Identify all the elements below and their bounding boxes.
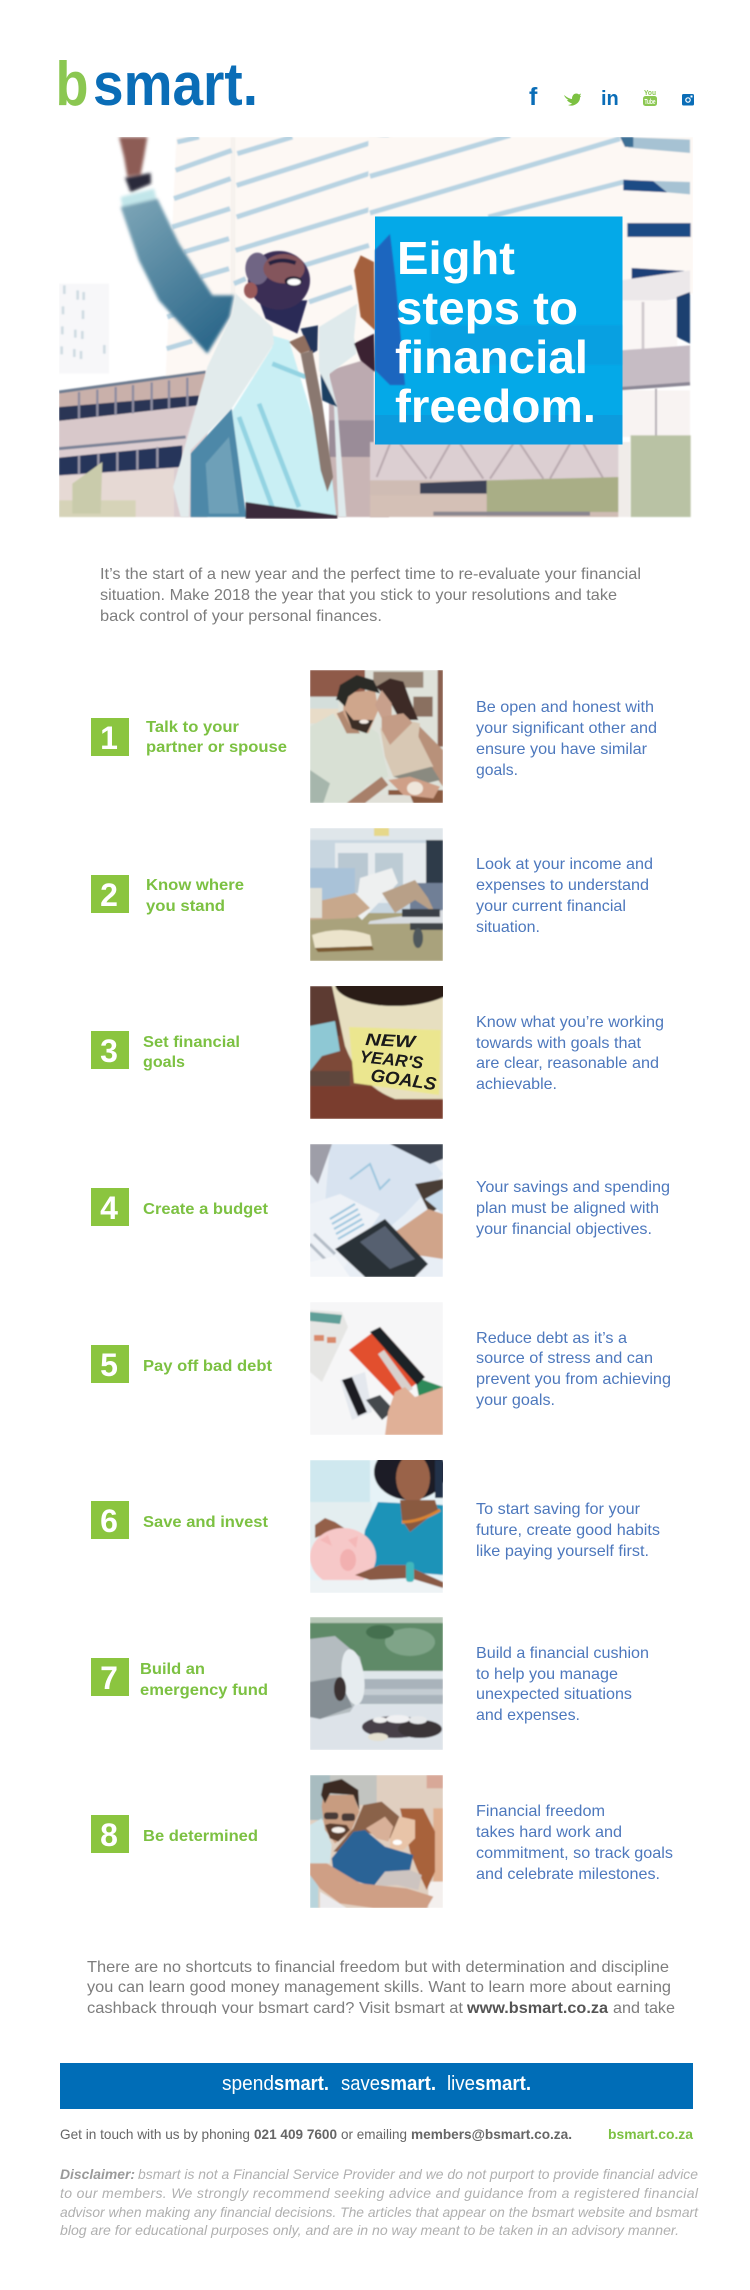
photo: mug with sticky note: GOALS	[369, 1065, 438, 1094]
tagline banner: live	[447, 2073, 475, 2095]
step 7	[91, 1617, 649, 1750]
tagline banner: smart.	[274, 2073, 329, 2095]
photo: mug with sticky note: NEW	[365, 1030, 418, 1052]
icon: youtube	[643, 88, 657, 106]
step 6 heading: Save and invest	[143, 1514, 269, 1531]
closing text (clipped)	[87, 1959, 675, 2017]
step 2 description: expenses to understand	[476, 877, 649, 894]
tagline banner: save	[341, 2073, 380, 2095]
step 2 heading: Know where	[146, 877, 244, 894]
step 2 description: Look at your income and	[476, 856, 653, 873]
photo: happy family hug	[310, 1775, 443, 1908]
number badge 2: 2	[100, 877, 118, 913]
step 2 description	[476, 856, 653, 936]
step 2	[91, 828, 653, 961]
step 8 description: takes hard work and	[476, 1824, 622, 1841]
step 2 description: situation.	[476, 919, 540, 936]
number badge 2	[91, 875, 129, 913]
step 7 heading	[140, 1661, 268, 1699]
step 1 description	[476, 699, 657, 779]
intro text: back control of your personal finances.	[100, 608, 382, 625]
step 5 heading: Pay off bad debt	[143, 1358, 273, 1375]
contact line: Get in touch with us by phoning	[60, 2126, 250, 2142]
step 7 description	[476, 1645, 649, 1724]
step 7 heading: emergency fund	[140, 1682, 268, 1699]
step 5 description: source of stress and can	[476, 1350, 653, 1367]
step 8	[91, 1775, 673, 1908]
logo: b	[56, 50, 88, 119]
closing text (clipped): and take	[613, 2000, 675, 2017]
contact line	[60, 2126, 693, 2142]
step 5 description: prevent you from achieving	[476, 1371, 671, 1388]
title: steps to	[396, 282, 578, 334]
step 1 description: your significant other and	[476, 720, 657, 737]
step 7 description: and expenses.	[476, 1707, 580, 1724]
step 7 heading: Build an	[140, 1661, 205, 1678]
step 4 heading: Create a budget	[143, 1201, 269, 1218]
icon: facebook: f	[529, 83, 538, 111]
step 6 description	[476, 1501, 660, 1560]
number badge 4	[91, 1188, 129, 1226]
number badge 8: 8	[100, 1817, 118, 1853]
step 6 description: like paying yourself first.	[476, 1543, 649, 1560]
step 5 description: Reduce debt as it’s a	[476, 1330, 627, 1347]
disclaimer: to our members. We strongly recommend seeking advice and guidance from a registered financial	[60, 2185, 699, 2201]
step 7 description: Build a financial cushion	[476, 1645, 649, 1662]
contact line: members@bsmart.co.za.	[411, 2126, 572, 2142]
background left half	[59, 137, 392, 517]
step 1	[91, 670, 657, 803]
photo: hand holding credit cards	[310, 1302, 443, 1435]
icon: twitter	[564, 94, 581, 106]
step 4	[91, 1144, 670, 1277]
step 3 description: achievable.	[476, 1076, 557, 1093]
closing text (clipped): There are no shortcuts to financial freedom but with determination and discipline	[87, 1959, 669, 1976]
number badge 3: 3	[100, 1033, 118, 1069]
step 1 heading: partner or spouse	[146, 739, 287, 756]
background right half	[368, 135, 693, 517]
disclaimer: bsmart is not a Financial Service Provider and we do not purport to provide financial advice	[138, 2166, 698, 2182]
step 1 heading: Talk to your	[146, 719, 239, 736]
step 3 heading: Set financial	[143, 1034, 240, 1051]
step 8 description	[476, 1803, 673, 1883]
social icons	[529, 83, 694, 111]
number badge 7	[91, 1658, 129, 1696]
step 1 heading	[146, 719, 287, 756]
step 5	[91, 1302, 671, 1435]
step 4 description: your financial objectives.	[476, 1221, 652, 1238]
intro text: It’s the start of a new year and the perfect time to re-evaluate your financial	[100, 566, 641, 583]
disclaimer: advisor when making any financial decisions. The articles that appear on the bsmart website and bsmart	[60, 2204, 699, 2220]
contact line: or emailing	[341, 2126, 407, 2142]
man	[119, 137, 375, 519]
step 3 heading: goals	[143, 1054, 185, 1071]
step 8 heading: Be determined	[143, 1828, 258, 1845]
disclaimer: blog are for educational purposes only, and are in no way meant to be taken in an advisory manner.	[60, 2222, 679, 2238]
step 8 description: commitment, so track goals	[476, 1845, 673, 1862]
icon: instagram	[682, 94, 694, 106]
contact line: bsmart.co.za	[608, 2126, 693, 2142]
step 5 description	[476, 1330, 671, 1409]
number badge 8	[91, 1815, 129, 1853]
photo: mug with sticky note: YEAR'S	[359, 1047, 425, 1073]
icon: youtube: Tube	[644, 97, 656, 106]
step 8 description: and celebrate milestones.	[476, 1866, 660, 1883]
disclaimer	[60, 2166, 699, 2238]
title: financial	[395, 331, 588, 383]
title panel	[375, 216, 622, 444]
step 2 heading	[146, 877, 244, 915]
tagline banner	[60, 2063, 693, 2109]
number badge 5: 5	[100, 1347, 118, 1383]
title	[395, 232, 596, 432]
step 7 description: unexpected situations	[476, 1686, 632, 1703]
number badge 4: 4	[100, 1190, 118, 1226]
photo: woman with piggy bank	[310, 1460, 443, 1593]
step 2 heading: you stand	[146, 898, 225, 915]
number badge 1	[91, 718, 129, 756]
number badge 3	[91, 1031, 129, 1069]
step 1 description: Be open and honest with	[476, 699, 654, 716]
photo: calculator on financial charts	[310, 1144, 443, 1277]
step 3	[91, 986, 663, 1119]
closing text (clipped): www.bsmart.co.za	[466, 2000, 608, 2017]
tagline banner: smart.	[380, 2073, 436, 2095]
tagline banner: smart.	[475, 2073, 531, 2095]
step 7 description: to help you manage	[476, 1666, 618, 1683]
number badge 5	[91, 1345, 129, 1383]
number badge 6: 6	[100, 1503, 118, 1539]
step 4 description	[476, 1179, 670, 1238]
contact line: 021 409 7600	[254, 2126, 337, 2142]
title: freedom.	[395, 380, 596, 432]
logo: smart.	[93, 51, 258, 118]
hero photo: man celebrating in front of office building	[59, 135, 693, 519]
step 6	[91, 1460, 660, 1593]
step 3 description: are clear, reasonable and	[476, 1055, 659, 1072]
closing text (clipped): cashback through your bsmart card? Visit bsmart at	[87, 2000, 464, 2017]
step 3 heading	[143, 1034, 240, 1071]
step 6 description: future, create good habits	[476, 1522, 660, 1539]
step 6 description: To start saving for your	[476, 1501, 641, 1518]
step 3 description: towards with goals that	[476, 1035, 642, 1052]
disclaimer: Disclaimer:	[60, 2166, 135, 2182]
photo: hands with receipts and laptop	[310, 828, 443, 961]
number badge 7: 7	[100, 1660, 118, 1696]
tagline banner: spend	[222, 2073, 274, 2095]
closing text (clipped): you can learn good money management skills. Want to learn more about earning	[87, 1979, 671, 1996]
title: Eight	[397, 232, 515, 284]
step 1 description: goals.	[476, 762, 518, 779]
step 5 description: your goals.	[476, 1392, 555, 1409]
step 1 description: ensure you have similar	[476, 741, 648, 758]
step 4 description: plan must be aligned with	[476, 1200, 659, 1217]
photo: couple	[310, 670, 443, 803]
icon: youtube: You	[644, 88, 656, 97]
step 4 description: Your savings and spending	[476, 1179, 670, 1196]
step 3 description: Know what you’re working	[476, 1014, 664, 1031]
intro text: situation. Make 2018 the year that you stick to your resolutions and take	[100, 587, 617, 604]
icon: linkedin: in	[601, 88, 619, 110]
intro text	[100, 566, 641, 625]
step 8 description: Financial freedom	[476, 1803, 605, 1820]
number badge 1: 1	[100, 720, 118, 756]
photo: mug with sticky note	[310, 986, 443, 1119]
step 3 description	[476, 1014, 664, 1093]
number badge 6	[91, 1501, 129, 1539]
photo: spilled coin jar	[310, 1617, 443, 1750]
step 2 description: your current financial	[476, 898, 626, 915]
